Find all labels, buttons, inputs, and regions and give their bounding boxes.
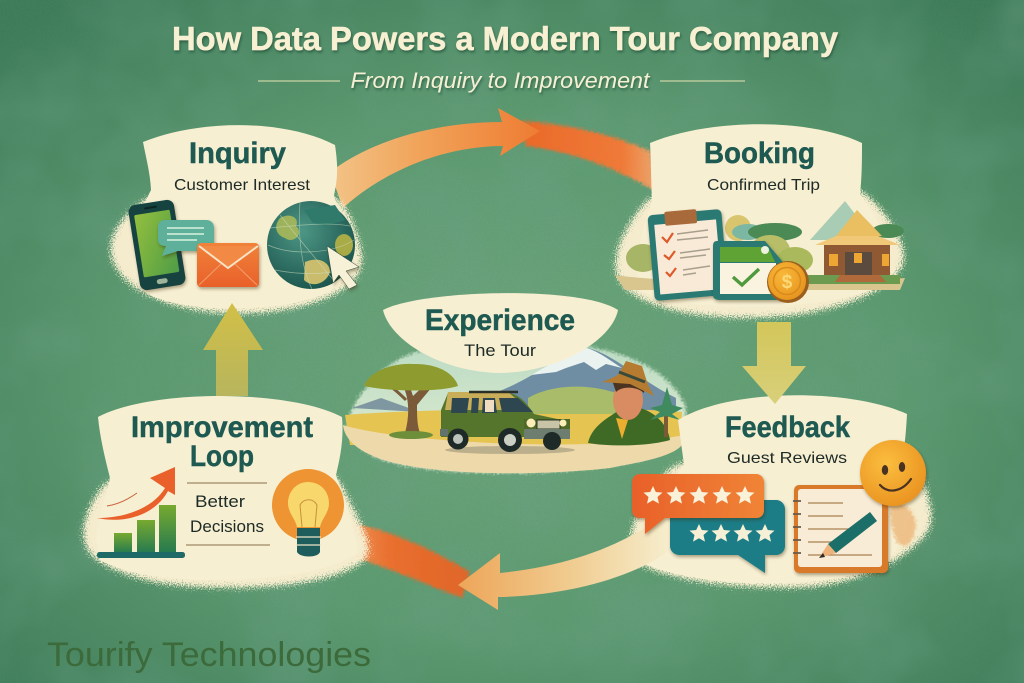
label: better decisions: Better	[195, 492, 245, 511]
panel: booking	[614, 124, 905, 318]
icon: acacia tree	[364, 364, 458, 439]
icon: teal review bubble	[670, 500, 785, 573]
panel: feedback content	[632, 411, 926, 573]
label: confirmed trip: Confirmed Trip	[707, 177, 820, 194]
heading: booking: Booking	[704, 137, 815, 170]
icon: coin	[767, 261, 809, 303]
arrow: inquiry to booking	[330, 108, 656, 208]
title: How Data Powers a Modern Tour Company	[172, 20, 839, 57]
heading: feedback: Feedback	[725, 411, 850, 444]
label: better decisions: Decisions	[190, 517, 264, 536]
panel: improvement loop	[82, 396, 372, 588]
icon: coin: $	[782, 272, 793, 293]
arrow: booking to feedback	[742, 322, 806, 404]
icon: tour guide	[588, 361, 670, 445]
icon: calendar	[713, 241, 783, 300]
scene: savanna ground and road	[343, 387, 684, 473]
label: guest reviews: Guest Reviews	[727, 450, 847, 467]
icon: globe with cursor	[267, 201, 359, 289]
arrow: orange tail into improvement	[345, 522, 470, 598]
icon: chat bubble	[158, 220, 214, 256]
label: customer interest: Customer Interest	[174, 177, 311, 194]
icon: checklist clipboard	[647, 209, 729, 301]
scene: lodge landscape	[615, 201, 905, 290]
icon: smartphone	[128, 199, 186, 291]
arrow: feedback to improvement	[458, 512, 672, 610]
panel: feedback background	[629, 395, 932, 588]
heading: improvement: Improvement	[131, 411, 313, 444]
icon: growth chart	[97, 467, 185, 558]
heading: experience: Experience	[425, 304, 575, 337]
panel: experience	[343, 293, 686, 473]
icon: envelope	[197, 243, 259, 287]
scene: mountain	[352, 348, 676, 420]
icon: orange review bubble	[632, 474, 764, 534]
heading: loop: Loop	[190, 440, 254, 473]
icon: safari jeep	[440, 392, 575, 454]
label: the tour: The Tour	[464, 341, 536, 360]
icon: light bulb	[272, 469, 344, 556]
heading: inquiry: Inquiry	[189, 137, 286, 170]
panel: inquiry	[109, 125, 363, 314]
icon: notebook and pencil	[793, 485, 888, 573]
icon: lodge	[815, 210, 900, 282]
heading plate: experience	[383, 293, 618, 373]
arrow: improvement to inquiry	[203, 303, 263, 396]
icon: palm	[650, 387, 683, 437]
icon: smiley	[860, 440, 926, 506]
company name: Tourify Technologies	[47, 636, 371, 674]
label: better decisions	[190, 492, 264, 536]
subtitle: From Inquiry to Improvement	[350, 68, 650, 93]
